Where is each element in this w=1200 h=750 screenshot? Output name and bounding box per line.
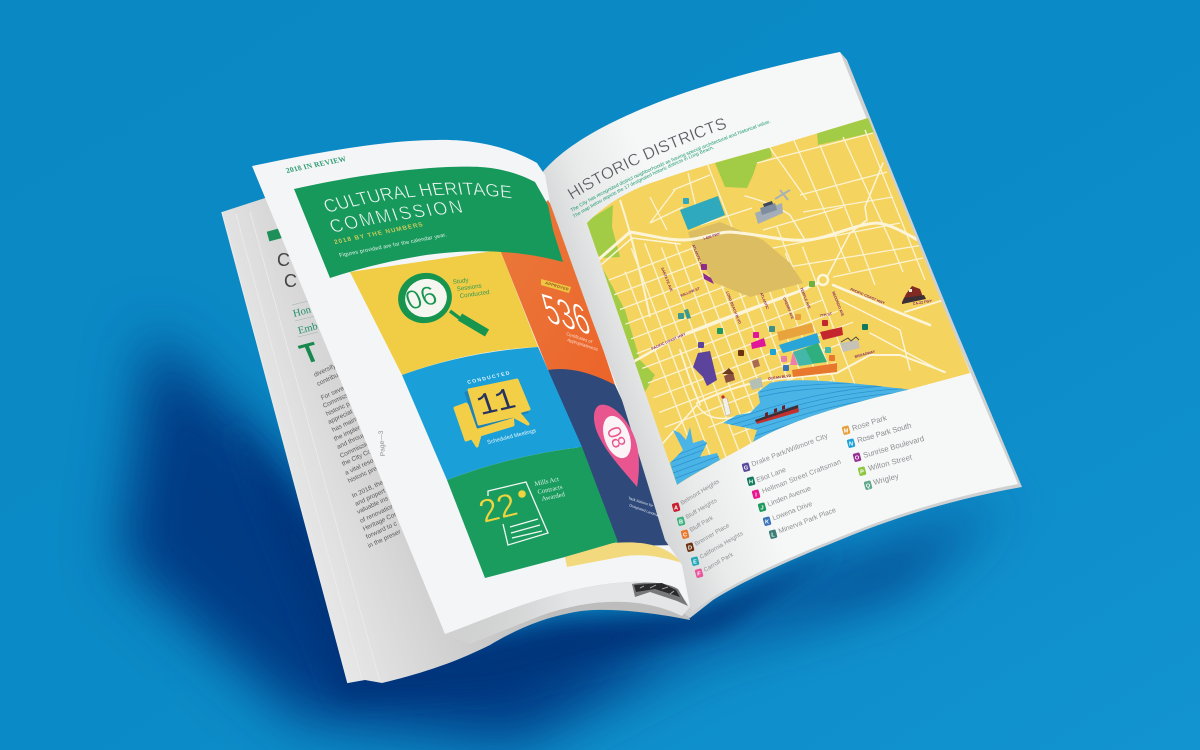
street grid [608,242,856,471]
legend column one: Belmont Heights [680,479,721,507]
road labels: OCEAN BLVD [768,374,792,381]
subtitle: 2018 BY THE NUMBERS [333,221,424,246]
road labels: BROADWAY [854,350,876,359]
legend column three [842,413,925,490]
label: mills act [534,476,566,503]
panel: blue meetings [402,347,582,480]
road labels: I-405 FWY [703,232,721,241]
road labels: CA-22 FWY [913,299,933,306]
legend column three: Wilton Street [867,452,914,473]
right page [542,52,1022,618]
map markers [678,198,868,371]
book drop shadow [120,330,1010,745]
legend column two: K [765,520,769,526]
note: Figures provided are for the calendar year. [338,232,448,259]
map base [587,118,970,485]
legend column one [672,479,744,578]
panel: green contracts [447,447,618,578]
back page body copy: appreciat [327,408,354,426]
legend column three: O [855,456,860,462]
legend column two: Lowena Drive [772,501,814,522]
back page tag [267,228,284,241]
page stack under left page [445,582,690,644]
airport terminal [755,201,783,224]
legend column three: N [849,442,853,448]
map [587,118,970,485]
label: task actions: Designated Landmarks [629,503,663,519]
road labels: ATLANTIC [759,292,770,310]
label: mills act: Mills Act [534,476,560,488]
map strip [565,542,680,567]
legend column two: Eliot Lane [756,467,787,484]
back page body copy: historic p [325,400,351,418]
legend column one: B [679,520,683,526]
photo sliver at bottom of gutter [632,583,688,606]
back page subheading [292,300,319,337]
legend column three: Wrigley [872,471,900,487]
parks [580,118,975,400]
icon: contract document 22: 22 [474,487,522,531]
legend column two: J [760,506,764,512]
running head: 2018 IN REVIEW [284,154,348,175]
label: task actions [628,496,663,519]
panel: green title banner [294,167,563,278]
heading: historic districts: HISTORIC DISTRICTS [568,118,726,199]
left page infographic [294,167,700,590]
brochure mockup scene [80,52,1022,750]
back page subheading: Emb [297,321,319,337]
road labels: ATLANTIC AVE [691,244,705,270]
legend column two: Minerva Park Place [778,507,837,535]
title: CULTURAL HERITAGE [324,182,512,212]
icon: airplane [775,190,790,200]
back page body copy: For seve [320,385,346,402]
conducted label: CONDUCTED [467,370,511,386]
panel: orange approved [500,200,616,387]
legend [672,413,925,578]
left page [252,140,690,644]
icon: contract document 22 [474,482,548,545]
back page body copy: has maint [331,416,359,434]
road labels: CHERRY AVE [782,297,795,320]
approved tag: APPROVED [545,281,569,292]
icon: speech bubbles 11: 11 [473,383,521,424]
road labels: LONG BEACH BLVD [725,291,742,325]
district blocks [680,196,843,386]
back page body copy: In 2018, the [351,479,385,500]
water [665,380,915,485]
back pages [222,180,690,683]
label: mills act: Awarded [541,491,566,503]
page number: Page—3 [378,430,387,456]
road labels: REDONDO AVE [831,291,845,317]
legend column one: A [674,506,678,512]
icon: speech bubbles 11 [455,380,529,446]
back page body copy: Commission [339,438,374,460]
back page heading: C [277,250,290,270]
back page body copy: diversify [313,362,338,379]
back page heading [277,250,297,291]
legend column one: Carroll Park [703,552,735,574]
label: scheduled meetings: Scheduled Meetings [486,428,537,446]
airport land [688,222,803,297]
label: study sessions: Conducted [459,289,490,300]
label: task actions: Task Actions for [628,496,654,508]
number 536: 536 [536,283,596,345]
upper streets [620,130,925,317]
icon: magnifier 06 [392,267,487,333]
legend column two: L [771,532,775,538]
back page body copy: forward to c [365,520,399,541]
legend column one: Bluff Park [689,515,715,534]
road labels: 7TH ST [819,312,833,318]
label: certificates: Certificates of [566,331,594,344]
label: certificates: Appropriateness [567,337,599,352]
legend column one: C [683,532,687,538]
legend column one: F [697,572,701,578]
legend column three: Rose Park [851,413,888,433]
landmark buildings [722,337,860,390]
legend column three: P [860,470,864,476]
label: mills act: Contracts [537,484,564,496]
icon: lighthouse [721,395,731,416]
legend column two: Linden Avenue [767,485,812,508]
back page body copy: in the preser [367,528,403,550]
icon: ranch house [902,286,926,304]
back page body copy: valuable ins [356,495,389,516]
back page body copy: contribu [316,372,340,388]
legend column one: E [693,560,697,566]
title [324,182,512,232]
back page body copy: the City Co [341,448,373,468]
legend column three: M [844,428,849,434]
legend column two: H [749,480,753,486]
freeways and arterials [598,163,950,443]
legend column two [742,433,842,539]
back page body copy: Heritage Con [362,510,399,533]
intro text: The map below depicts the 17 designated historic districts in Long Beach. [572,146,714,218]
back page body copy: the implem [333,423,364,443]
legend column three: Sunrise Boulevard [862,434,925,460]
legend column three: Q [866,484,871,490]
approved tag [541,279,571,293]
panel: yellow study sessions [350,250,538,375]
road labels: SANTA FE AVE [660,267,674,293]
title: COMMISSION [330,200,462,232]
road labels: WILLOW ST [680,286,701,298]
legend column two: Hellman Street Craftsman [761,459,842,495]
road labels: PACIFIC COAST HWY [651,332,687,351]
roundabout [818,275,828,285]
back page body copy: a vital reso [344,457,375,477]
back page heading: C [284,271,297,291]
legend column two: I [755,492,757,498]
icon: map pin 08: 08 [602,424,629,451]
road labels: TEMPLE AVE [799,287,811,310]
back page body copy: historic pre [347,465,379,485]
label: study sessions: Sessions [456,283,482,293]
back page body copy: of renovation [359,503,396,525]
back page body copy: and throug [336,431,367,451]
icon: map pin 08 [594,405,639,487]
intro text: The City has recognized district neighborhoods as having special architectural and historical value. [570,120,770,212]
back page subheading: Hon [292,304,313,320]
legend column two: G [744,466,748,472]
back page body copy: Commiss [322,392,349,410]
icon: ship [755,405,799,424]
legend column two: Drake Park/Willmore City [751,433,829,468]
back page body copy: and propert [354,488,387,508]
road labels: PACIFIC COAST HWY [850,287,886,306]
legend column one: D [688,546,692,552]
legend column one: Brenner Place [694,523,731,548]
label: certificates [566,331,599,352]
back page body copy [313,362,403,550]
label: study sessions: Study [452,277,470,286]
icon: magnifier 06: 06 [401,279,441,316]
label: study sessions [452,277,490,300]
back page text [267,228,403,550]
legend column three: Rose Park South [856,421,912,445]
legend column one: Bluff Heights [685,498,718,521]
legend column one: California Heights [699,531,744,561]
road labels [651,232,933,381]
panel: navy task actions [548,369,680,546]
drop cap: T [295,336,324,370]
